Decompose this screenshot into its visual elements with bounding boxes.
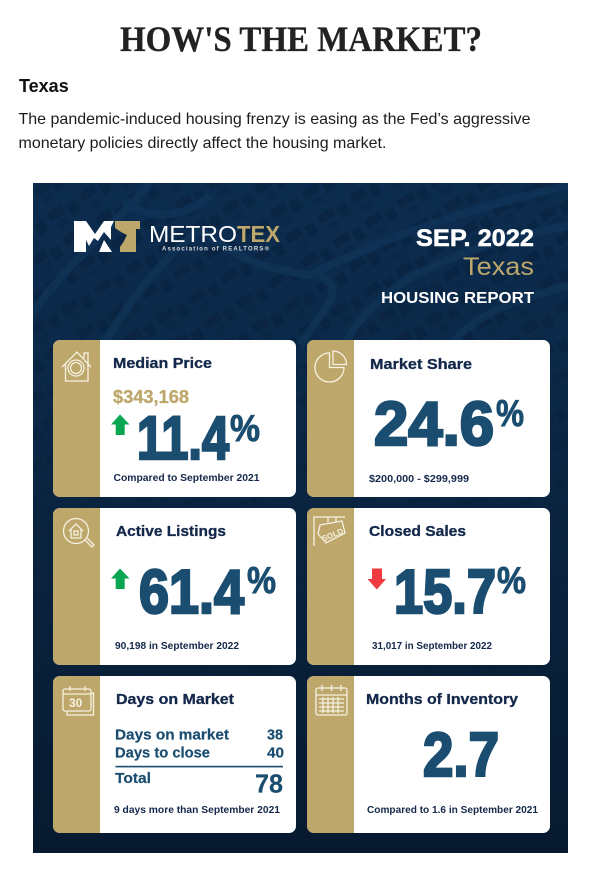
panel: days on market <box>53 676 296 833</box>
sales note: 31,017 in September 2022 <box>372 641 492 652</box>
table rows <box>115 726 284 798</box>
price: $343,168 <box>113 387 189 407</box>
report heading: HOUSING REPORT <box>381 290 534 307</box>
heading: Days on Market <box>116 691 234 708</box>
icon: house with coin <box>62 352 91 381</box>
report heading: SEP. 2022 <box>416 225 534 252</box>
table rows: Total <box>115 770 151 787</box>
panel: median price <box>53 340 296 497</box>
table rows: Days to close <box>115 744 210 762</box>
comparison note: 9 days more than September 2021 <box>114 805 280 816</box>
percentage: 11.4 <box>137 404 229 472</box>
percentage: 24.6 <box>374 390 494 459</box>
subheading: Texas: Texas <box>19 76 69 96</box>
arrow up <box>111 414 130 435</box>
report poster <box>20 183 570 853</box>
report heading <box>381 225 534 307</box>
icon: calendar grid <box>316 685 347 715</box>
heading: Median Price <box>113 355 212 372</box>
intro paragraph <box>18 111 530 152</box>
heading: Months of Inventory <box>366 691 519 708</box>
heading: Closed Sales <box>369 523 466 540</box>
table rows: 40 <box>267 744 284 762</box>
table rows: 38 <box>267 726 283 744</box>
panel: market share <box>307 340 550 497</box>
icon: sold sign <box>314 517 345 546</box>
title: HOW'S THE MARKET? <box>120 19 482 59</box>
percentage: % <box>497 560 526 601</box>
intro paragraph: monetary policies directly affect the housing market. <box>18 135 386 152</box>
price range note: $200,000 - $299,999 <box>369 474 469 485</box>
percentage: % <box>230 408 260 449</box>
panel: closed sales <box>307 508 550 665</box>
percentage: 61.4 <box>139 558 244 627</box>
panel: months of inventory <box>307 676 550 833</box>
icon: magnifier over house <box>64 518 94 547</box>
icon: calendar 30 <box>63 686 94 715</box>
heading: Market Share <box>370 356 472 373</box>
listings note: 90,198 in September 2022 <box>115 641 239 652</box>
logo: Association of REALTORS® <box>162 246 270 253</box>
icon: pie chart <box>315 351 346 382</box>
poster background <box>20 183 570 853</box>
comparison note: Compared to September 2021 <box>114 473 260 484</box>
logo <box>74 221 281 253</box>
value: 2.7 <box>423 721 499 790</box>
arrow down <box>368 568 386 590</box>
panel: active listings <box>53 508 296 665</box>
comparison note: Compared to 1.6 in September 2021 <box>367 805 538 816</box>
arrow up <box>111 568 130 589</box>
intro paragraph: The pandemic-induced housing frenzy is easing as the Fed’s aggressive <box>18 111 530 128</box>
percentage: % <box>496 393 524 434</box>
table rows: Days on market <box>115 726 229 744</box>
percentage: % <box>247 560 276 601</box>
table rows: 78 <box>255 768 283 798</box>
heading: Active Listings <box>116 523 226 540</box>
report heading: Texas <box>463 253 534 281</box>
icon: sold sign: SOLD <box>321 527 345 543</box>
icon: calendar 30: 30 <box>69 696 83 710</box>
percentage: 15.7 <box>394 558 496 627</box>
logo: METRO <box>149 221 237 247</box>
logo: TEX <box>237 221 281 247</box>
